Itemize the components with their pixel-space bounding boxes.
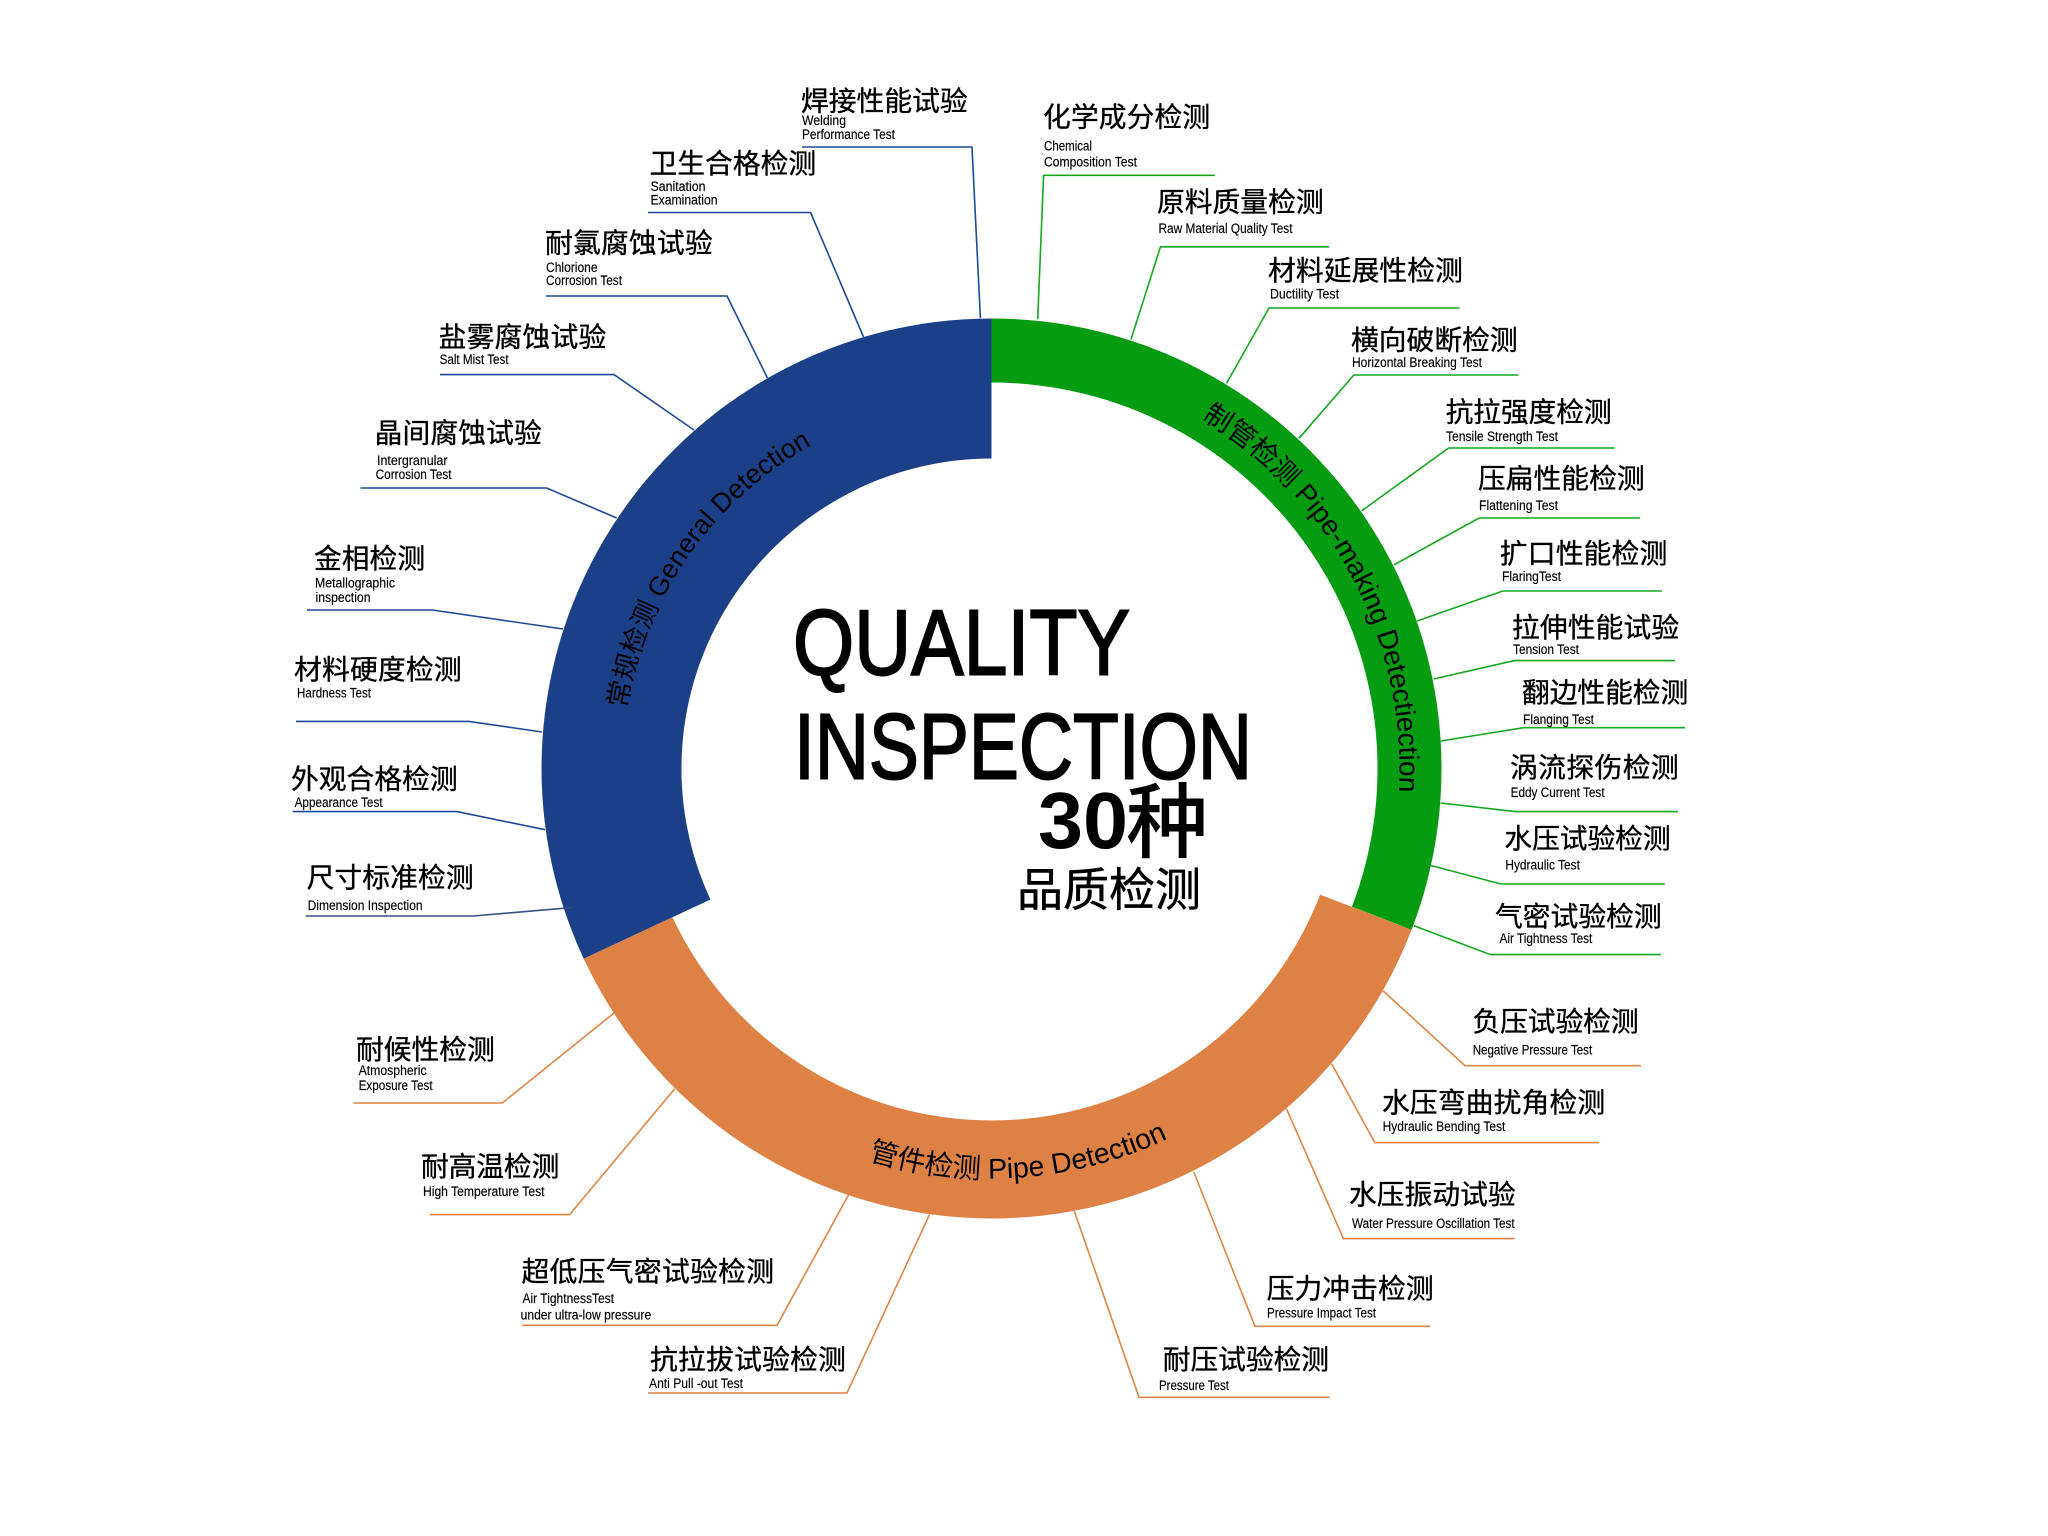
label: intergranular corrosion test: 晶间腐蚀试验 [375, 418, 542, 448]
label: chemical composition test: 化学成分检测 [1043, 102, 1210, 132]
label: hardness test: Hardness Test [297, 686, 371, 700]
label: negative pressure test: 负压试验检测 [1472, 1006, 1639, 1037]
label: sanitation examination: Sanitation [650, 179, 706, 194]
heading line: INSPECTION: INSPECTION [794, 695, 1252, 799]
label: chlorione corrosion test: Chlorione [546, 260, 598, 275]
label: ductility test [1226, 255, 1463, 383]
label: flaring test [1417, 538, 1667, 621]
label: hydraulic bending test: 水压弯曲扰角检测 [1382, 1087, 1605, 1118]
label: raw material quality test [1131, 187, 1329, 339]
label: pressure test [1074, 1211, 1330, 1397]
label: atmospheric exposure test: 耐候性检测 [356, 1034, 495, 1065]
label: welding performance test: 焊接性能试验 [801, 86, 968, 116]
label: eddy current test: 涡流探伤检测 [1510, 752, 1679, 783]
label: flattening test: 压扁性能检测 [1478, 463, 1645, 494]
label: atmospheric exposure test: Atmospheric [359, 1063, 427, 1078]
label: hydraulic test [1431, 823, 1671, 884]
label: high temperature test: High Temperature Test [423, 1184, 545, 1199]
label: hardness test: 材料硬度检测 [294, 654, 462, 685]
label: tensile strength test: Tensile Strength Test [1446, 429, 1558, 444]
label: anti pull-out test: Anti Pull -out Test [649, 1376, 743, 1391]
ring label: pipe-making detection: 制管检测 Pipe-making Detectiection [1204, 402, 1420, 791]
label: flattening test [1394, 463, 1645, 565]
label: appearance test: Appearance Test [295, 795, 383, 810]
label: eddy current test [1441, 752, 1679, 812]
labels: pipe-making detection tests [1038, 102, 1688, 955]
label: air tightness test under ultra-low pressure [521, 1195, 848, 1325]
label: anti pull-out test: 抗拉拔试验检测 [650, 1344, 846, 1375]
label: flanging test: Flanging Test [1523, 712, 1594, 727]
label: sanitation examination [648, 148, 864, 337]
label: raw material quality test: 原料质量检测 [1157, 187, 1324, 217]
label: tensile strength test: 抗拉强度检测 [1446, 397, 1612, 427]
label: water pressure oscillation test: 水压振动试验 [1349, 1179, 1516, 1210]
label: chemical composition test [1038, 102, 1215, 319]
label: air tightness test under ultra-low pressure: Air TightnessTest [522, 1291, 614, 1306]
label: water pressure oscillation test: Water Pressure Oscillation Test [1352, 1216, 1515, 1231]
label: flanging test [1441, 677, 1688, 741]
label: welding performance test: Performance Test [802, 127, 895, 142]
label: air tightness test under ultra-low pressure: under ultra-low pressure [521, 1308, 651, 1322]
label: salt mist test [439, 322, 694, 430]
label: tension test: 拉伸性能试验 [1512, 612, 1679, 643]
label: negative pressure test [1383, 991, 1641, 1066]
label: tension test: Tension Test [1513, 642, 1579, 657]
label: dimension inspection: Dimension Inspection [308, 898, 423, 913]
label: flattening test: Flattening Test [1479, 498, 1558, 513]
label: pressure test: Pressure Test [1159, 1378, 1229, 1393]
label: chlorione corrosion test: Corrosion Test [546, 273, 622, 288]
label: anti pull-out test [648, 1215, 930, 1393]
label: pressure impact test: 压力冲击检测 [1267, 1273, 1434, 1304]
label: salt mist test: Salt Mist Test [440, 352, 509, 367]
ring segment: pipe-making detection [992, 318, 1442, 930]
label: chemical composition test: Chemical [1044, 138, 1092, 153]
ring segment: pipe detection [584, 895, 1412, 1218]
label: hydraulic bending test: Hydraulic Bending Test [1383, 1119, 1506, 1134]
label: welding performance test: Welding [802, 113, 846, 128]
label: appearance test: 外观合格检测 [291, 764, 458, 794]
count unit: 种 [1126, 778, 1208, 869]
label: chlorione corrosion test: 耐氯腐蚀试验 [545, 228, 713, 258]
label: intergranular corrosion test: Corrosion Test [376, 467, 452, 482]
label: air tightness test: Air Tightness Test [1500, 931, 1593, 946]
label: water pressure oscillation test [1287, 1109, 1516, 1239]
labels: general detection tests [291, 86, 980, 916]
label: horizontal breaking test: 横向破断检测 [1351, 325, 1518, 355]
label: atmospheric exposure test [353, 1013, 614, 1103]
chart: detection ring [542, 318, 1442, 1218]
label: high temperature test: 耐高温检测 [421, 1151, 559, 1182]
label: pressure impact test: Pressure Impact Test [1267, 1306, 1376, 1320]
label: welding performance test [801, 86, 980, 318]
label: high temperature test [421, 1089, 675, 1215]
label: horizontal breaking test: Horizontal Breaking Test [1352, 355, 1482, 370]
ring label: general detection: 常规检测 General Detection [605, 434, 810, 705]
label: atmospheric exposure test: Exposure Test [359, 1078, 433, 1093]
label: air tightness test [1414, 901, 1662, 955]
label: metallographic inspection: inspection [316, 590, 370, 605]
label: sanitation examination: Examination [650, 193, 718, 208]
label: salt mist test: 盐雾腐蚀试验 [439, 322, 606, 352]
label: metallographic inspection [307, 543, 563, 629]
label: dimension inspection [306, 862, 572, 916]
label: metallographic inspection: 金相检测 [314, 543, 425, 574]
label: raw material quality test: Raw Material Quality Test [1158, 221, 1293, 236]
label: flaring test: 扩口性能检测 [1500, 538, 1667, 569]
label: appearance test [291, 764, 545, 830]
label: flaring test: FlaringTest [1502, 569, 1561, 584]
label: air tightness test under ultra-low pressure: 超低压气密试验检测 [521, 1256, 774, 1287]
title: centre heading [793, 590, 1252, 916]
ring segment: general detection [542, 318, 992, 959]
label: pressure impact test [1194, 1172, 1434, 1326]
label: flanging test: 翻边性能检测 [1522, 677, 1688, 708]
label: hydraulic test: 水压试验检测 [1504, 823, 1671, 854]
label: intergranular corrosion test [360, 418, 617, 518]
heading line: QUALITY: QUALITY [793, 590, 1130, 694]
label: ductility test: Ductility Test [1270, 287, 1339, 302]
label: eddy current test: Eddy Current Test [1511, 785, 1605, 800]
label: chlorione corrosion test [545, 228, 768, 378]
label: air tightness test: 气密试验检测 [1495, 901, 1662, 932]
label: hydraulic test: Hydraulic Test [1505, 858, 1580, 872]
label: hardness test [294, 654, 542, 732]
label: horizontal breaking test [1299, 325, 1518, 438]
label: dimension inspection: 尺寸标准检测 [307, 862, 474, 893]
label: ductility test: 材料延展性检测 [1268, 255, 1463, 286]
label: tension test [1434, 612, 1679, 679]
subtitle: 品质检测 [1017, 864, 1201, 916]
label: negative pressure test: Negative Pressure Test [1473, 1042, 1592, 1058]
label: pressure test: 耐压试验检测 [1163, 1344, 1329, 1375]
label: chemical composition test: Composition Test [1044, 154, 1137, 170]
ring label: pipe detection: 管件检测 Pipe Detection [873, 1126, 1166, 1184]
label: tensile strength test [1362, 397, 1614, 511]
label: sanitation examination: 卫生合格检测 [649, 148, 816, 179]
label: intergranular corrosion test: Intergranular [377, 453, 448, 468]
count: 30 kinds: 30 [1038, 776, 1128, 865]
labels: pipe detection tests [353, 991, 1641, 1397]
label: hydraulic bending test [1332, 1064, 1605, 1143]
label: metallographic inspection: Metallographic [315, 576, 395, 591]
